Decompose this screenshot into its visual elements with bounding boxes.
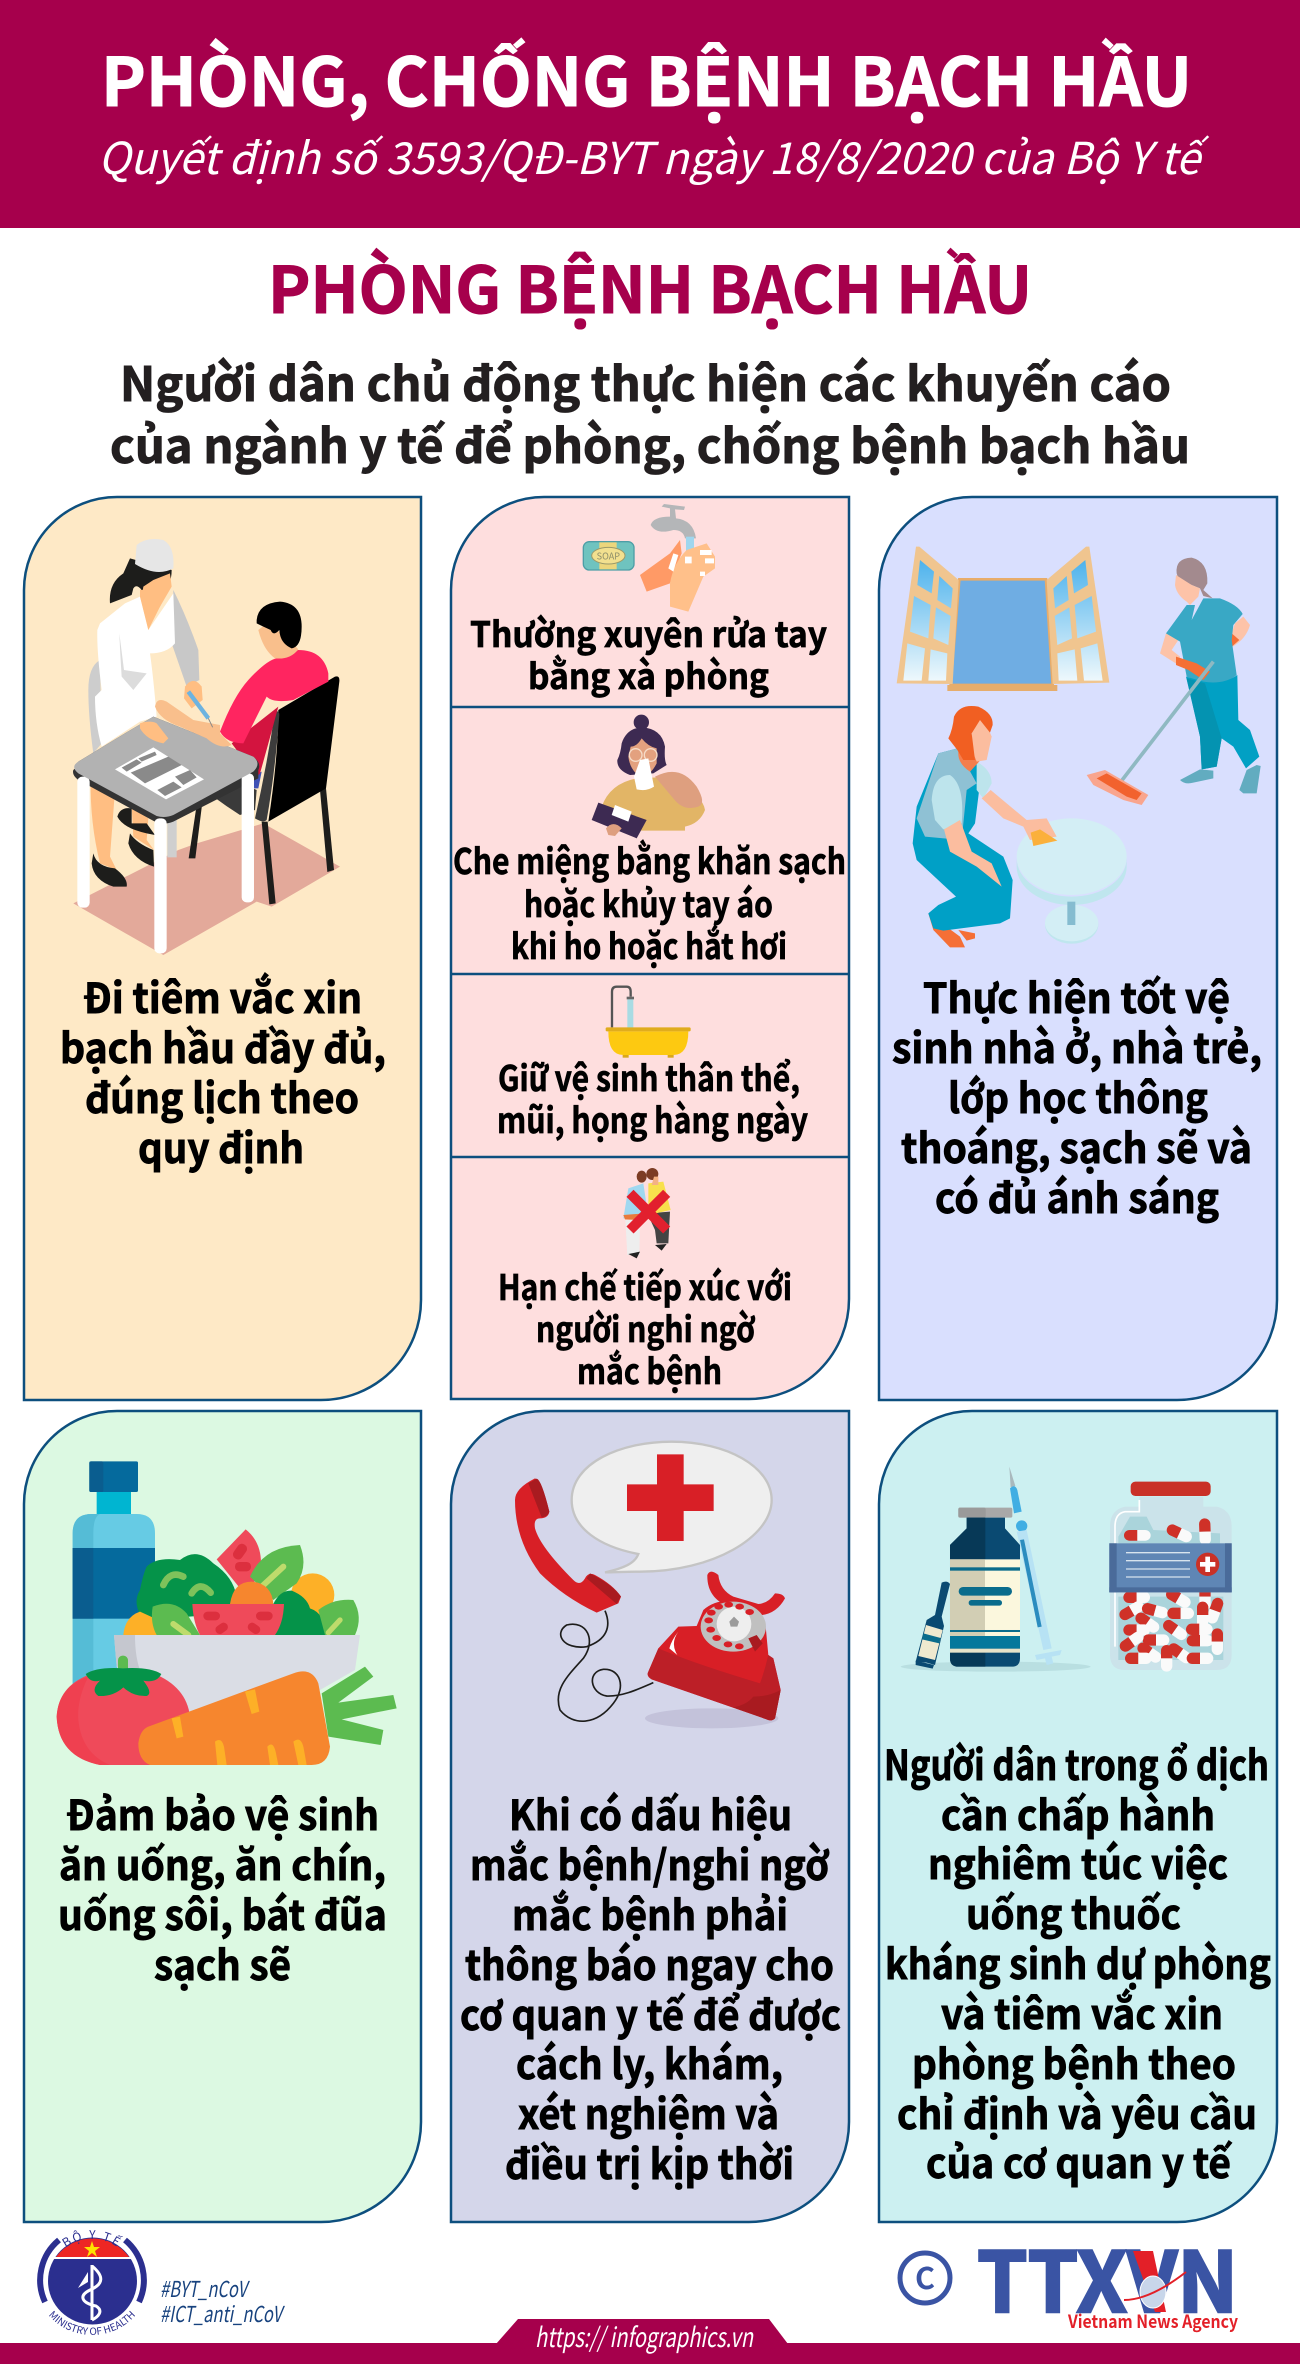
panel text: và tiêm vắc xin [941, 1981, 1223, 2041]
icon: soap and hand washing [583, 504, 715, 612]
panel text [460, 1782, 841, 2191]
icon: woman covering mouth with tissue [592, 715, 705, 838]
panel: outbreak compliance [879, 1411, 1277, 2222]
text: cover mouth: khi ho hoặc hắt hơi [511, 919, 787, 970]
panel text: phòng bệnh theo [912, 2031, 1236, 2091]
icon: red telephone with medical cross speech bubble [515, 1442, 785, 1728]
logo: Ministry of Health [37, 2230, 147, 2335]
website URL: https:// infographics.vn [535, 2316, 754, 2355]
panel text [892, 965, 1262, 1225]
logo: Ministry of Health: MINISTRY OF HEALTH [49, 2310, 135, 2335]
header banner [0, 0, 1300, 228]
hashtags [160, 2272, 285, 2329]
panel text: cách ly, khám, [516, 2031, 783, 2091]
text: cover mouth: Che miệng bằng khăn sạch [453, 834, 846, 885]
panel text: Thực hiện tốt vệ [923, 965, 1230, 1025]
footer bar with URL tab [0, 2316, 1300, 2364]
icon: soap and hand washing: SOAP [597, 548, 620, 562]
panel text: chỉ định và yêu cầu [897, 2081, 1257, 2141]
panel text: mắc bệnh/nghi ngờ [470, 1832, 829, 1892]
text: body hygiene [497, 1051, 808, 1144]
text: wash hands [470, 607, 827, 700]
panel text: Đảm bảo vệ sinh [66, 1782, 379, 1842]
panel text: Đi tiêm vắc xin [83, 965, 362, 1025]
intro text: Người dân chủ động thực hiện các khuyến cáo [120, 346, 1171, 415]
text: wash hands: bằng xà phòng [528, 649, 769, 700]
panel: food hygiene [24, 1411, 421, 2222]
subtitle: Quyết định số 3593/QĐ-BYT ngày 18/8/2020 của Bộ Y tế [98, 123, 1209, 187]
panel text: nghiêm túc việc [928, 1831, 1228, 1891]
text: limit contact: Hạn chế tiếp xúc với [498, 1260, 792, 1311]
panel text: thoáng, sạch sẽ và [901, 1115, 1252, 1175]
icon: bathtub [606, 987, 691, 1058]
panel text: quy định [138, 1115, 304, 1175]
section heading: PHÒNG BỆNH BẠCH HẦU [268, 240, 1032, 332]
text: body hygiene: Giữ vệ sinh thân thể, [498, 1051, 800, 1102]
panel text: sạch sẽ [154, 1932, 291, 1992]
panel: vaccination [24, 497, 421, 1400]
panel text: xét nghiệm và [518, 2081, 779, 2141]
text: limit contact: mắc bệnh [577, 1344, 722, 1395]
panel text [884, 1732, 1271, 2190]
text: body hygiene: mũi, họng hàng ngày [497, 1093, 808, 1144]
panel text: Khi có dấu hiệu [509, 1782, 792, 1842]
panel text: cần chấp hành [941, 1782, 1215, 1842]
panel: personal hygiene [451, 497, 849, 1399]
panel text: sinh nhà ở, nhà trẻ, [892, 1015, 1262, 1075]
panel: clean housing [879, 497, 1277, 1400]
panel text: kháng sinh dự phòng [885, 1931, 1271, 1991]
panel text: lớp học thông [948, 1065, 1208, 1125]
logo: TTXVN Vietnam News Agency: Vietnam News Agency [1067, 2308, 1239, 2334]
text: limit contact [498, 1260, 792, 1395]
panel text: điều trị kịp thời [505, 2131, 794, 2191]
logo: TTXVN Vietnam News Agency: C [915, 2254, 935, 2298]
panel text: mắc bệnh phải [512, 1882, 788, 1942]
panel text: uống sôi, bát đũa [58, 1882, 387, 1942]
text: cover mouth: hoặc khủy tay áo [524, 877, 773, 928]
hashtags: #ICT_anti_nCoV [160, 2297, 285, 2329]
panel text: ăn uống, ăn chín, [59, 1832, 386, 1892]
logo: TTXVN Vietnam News Agency: TTXVN [977, 2216, 1238, 2336]
panel text [58, 1782, 387, 1992]
panel text: cơ quan y tế để được [460, 1982, 841, 2042]
logo: Ministry of Health: BỘ Y TẾ [62, 2230, 123, 2247]
icon: open window and cleaning people [897, 547, 1261, 947]
panel text: bạch hầu đầy đủ, [60, 1015, 386, 1075]
main title: PHÒNG, CHỐNG BỆNH BẠCH HẦU [101, 29, 1192, 126]
icon: water bottle, salad bowl, tomato and carrot [57, 1461, 397, 1765]
panel text: của cơ quan y tế [926, 2130, 1232, 2190]
hashtags: #BYT_nCoV [160, 2272, 250, 2304]
icon: vaccine vial, syringe and pill jar [901, 1467, 1232, 1672]
panel text: uống thuốc [966, 1881, 1181, 1941]
panel text: có đủ ánh sáng [935, 1165, 1219, 1225]
intro text: của ngành y tế để phòng, chống bệnh bạch hầu [110, 408, 1190, 477]
panel text: thông báo ngay cho [465, 1932, 834, 1992]
intro text [110, 346, 1190, 477]
text: limit contact: người nghi ngờ [536, 1302, 755, 1353]
icon: crossed-out hugging people [623, 1168, 671, 1258]
panel: report symptoms [451, 1411, 849, 2222]
text: wash hands: Thường xuyên rửa tay [470, 607, 827, 658]
panel text: đúng lịch theo [85, 1065, 359, 1125]
panel text [60, 965, 386, 1175]
text: cover mouth [453, 834, 846, 970]
icon: nurse vaccinating patient [73, 539, 340, 955]
